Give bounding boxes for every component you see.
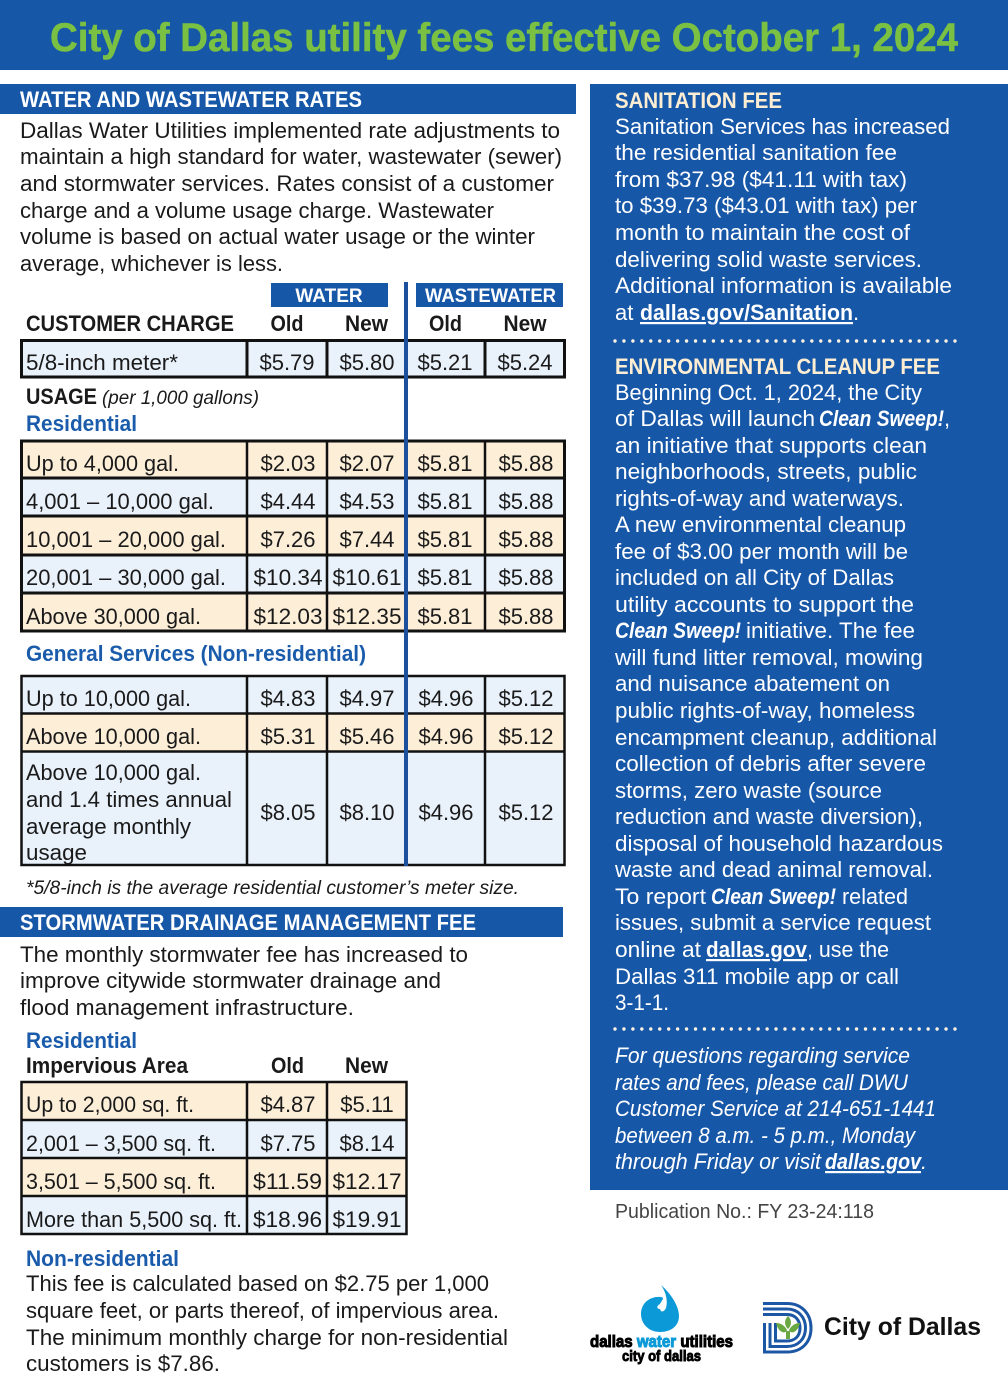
footnote: *5/8-inch is the average residential customer’s meter size. xyxy=(26,878,519,899)
table: water and wastewater rates xyxy=(21,282,565,866)
stormwater table header xyxy=(26,1028,389,1078)
sanitation fee section: SANITATION FEE xyxy=(615,88,782,113)
general services rows: Up to 10,000 gal. xyxy=(26,686,191,711)
general services rows: Above 10,000 gal. xyxy=(26,760,201,785)
text block: water rates intro: maintain a high standard for water, wastewater (sewer) xyxy=(20,144,562,169)
stormwater rows xyxy=(21,1082,407,1234)
residential rows: 20,001 – 30,000 gal. xyxy=(26,565,226,590)
residential rows: Above 30,000 gal. xyxy=(26,604,201,629)
contact information: For questions regarding service xyxy=(615,1043,910,1068)
stormwater rows: $12.17 xyxy=(332,1169,402,1194)
table column headers xyxy=(26,283,563,336)
contact information: rates and fees, please call DWU xyxy=(615,1070,908,1095)
environmental cleanup fee section: of Dallas will launch xyxy=(615,406,815,431)
environmental cleanup fee section: will fund litter removal, mowing xyxy=(614,645,923,670)
text block: non-residential stormwater: Non-residential xyxy=(26,1246,179,1271)
environmental cleanup fee section: rights-of-way and waterways. xyxy=(615,486,904,511)
text block: water rates intro xyxy=(20,118,562,276)
general services rows: usage xyxy=(26,840,87,865)
table column headers: New xyxy=(504,311,547,336)
residential rows: $5.81 xyxy=(417,604,473,629)
heading: general services: General Services (Non-residential) xyxy=(26,641,366,666)
environmental cleanup fee section: utility accounts to support the xyxy=(615,592,914,617)
residential rows: $2.07 xyxy=(339,451,395,476)
general services rows xyxy=(21,676,565,865)
text block: non-residential stormwater: square feet, or parts thereof, of impervious area. xyxy=(26,1298,499,1323)
stormwater table header: Old xyxy=(271,1053,304,1078)
environmental cleanup fee section: , use the xyxy=(807,937,889,962)
environmental cleanup fee section: A new environmental cleanup xyxy=(615,512,906,537)
text block: stormwater intro: improve citywide stormwater drainage and xyxy=(20,968,441,993)
heading: stormwater drainage management fee: STORMWATER DRAINAGE MANAGEMENT FEE xyxy=(20,910,476,935)
title banner xyxy=(0,0,1008,70)
water / wastewater divider xyxy=(404,282,408,866)
sanitation fee section: dallas.gov/Sanitation xyxy=(640,300,853,325)
text block: water rates intro: average, whichever is less. xyxy=(20,251,283,276)
table column headers: CUSTOMER CHARGE xyxy=(26,311,234,336)
environmental cleanup fee section: related xyxy=(842,884,908,909)
stormwater rows: More than 5,500 sq. ft. xyxy=(26,1207,242,1232)
residential rows: $12.03 xyxy=(254,604,322,629)
environmental cleanup fee section: collection of debris after severe xyxy=(615,751,926,776)
sanitation fee section: at xyxy=(615,300,633,325)
residential rows: $5.81 xyxy=(417,527,473,552)
row: customer charge xyxy=(21,340,565,377)
environmental cleanup fee section: reduction and waste diversion), xyxy=(615,804,923,829)
residential rows: $5.81 xyxy=(417,565,473,590)
residential rows: $5.81 xyxy=(417,451,473,476)
residential rows: $4.44 xyxy=(260,489,316,514)
contact information xyxy=(615,1043,936,1174)
table column headers: WATER xyxy=(295,286,363,307)
usage heading: USAGE xyxy=(26,384,97,409)
panel: sanitation, cleanup and contact xyxy=(590,84,1008,1190)
stormwater table header: Residential xyxy=(26,1028,137,1053)
sanitation fee section: month to maintain the cost of xyxy=(615,220,911,245)
text block: stormwater intro: The monthly stormwater fee has increased to xyxy=(20,942,468,967)
residential rows: $7.26 xyxy=(260,527,316,552)
stormwater rows: 2,001 – 3,500 sq. ft. xyxy=(26,1131,216,1156)
general services rows: $5.12 xyxy=(498,800,554,825)
environmental cleanup fee section: included on all City of Dallas xyxy=(615,565,894,590)
text block: non-residential stormwater: customers is $7.86. xyxy=(26,1351,220,1376)
general services rows: $5.46 xyxy=(339,724,395,749)
environmental cleanup fee section: issues, submit a service request xyxy=(615,910,931,935)
general services rows: $5.31 xyxy=(260,724,316,749)
general services rows: $8.05 xyxy=(260,800,316,825)
usage heading: (per 1,000 gallons) xyxy=(102,388,259,409)
sanitation fee section: delivering solid waste services. xyxy=(615,247,922,272)
text block: non-residential stormwater xyxy=(26,1246,508,1376)
residential rows: $5.88 xyxy=(498,489,554,514)
general services rows: Above 10,000 gal. xyxy=(26,724,201,749)
environmental cleanup fee section: To report xyxy=(615,884,706,909)
text block: water rates intro: volume is based on actual water usage or the winter xyxy=(20,224,535,249)
general services rows: $5.12 xyxy=(498,686,554,711)
logo: dallas water utilities: city of dallas xyxy=(622,1348,701,1365)
sanitation fee section xyxy=(615,88,952,325)
general services rows: $8.10 xyxy=(339,800,395,825)
sanitation fee section: . xyxy=(853,300,859,325)
residential rows: $2.03 xyxy=(260,451,316,476)
residential rows: 4,001 – 10,000 gal. xyxy=(26,489,214,514)
general services rows: $4.97 xyxy=(339,686,395,711)
general services rows: $4.83 xyxy=(260,686,316,711)
row: customer charge: $5.24 xyxy=(497,350,553,375)
residential rows xyxy=(21,441,565,631)
residential rows: $10.61 xyxy=(332,565,402,590)
text block: water rates intro: and stormwater services. Rates consist of a customer xyxy=(20,171,554,196)
table column headers: WASTEWATER xyxy=(425,286,556,307)
logo: dallas water utilities: dallas water utilities xyxy=(590,1332,733,1351)
environmental cleanup fee section: 3-1-1. xyxy=(615,990,669,1015)
environmental cleanup fee section: Beginning Oct. 1, 2024, the City xyxy=(615,380,922,405)
environmental cleanup fee section: and nuisance abatement on xyxy=(615,671,890,696)
residential rows: $5.88 xyxy=(498,604,554,629)
text block: water rates intro: charge and a volume usage charge. Wastewater xyxy=(20,198,494,223)
stormwater table header: Impervious Area xyxy=(26,1053,189,1078)
residential rows: Up to 4,000 gal. xyxy=(26,451,179,476)
usage heading: Residential xyxy=(26,411,137,436)
contact information: between 8 a.m. - 5 p.m., Monday xyxy=(615,1123,917,1148)
stormwater rows: $8.14 xyxy=(339,1131,395,1156)
sanitation fee section: Additional information is available xyxy=(615,273,952,298)
environmental cleanup fee section: Dallas 311 mobile app or call xyxy=(615,964,899,989)
general services rows: $4.96 xyxy=(418,724,474,749)
environmental cleanup fee section: ENVIRONMENTAL CLEANUP FEE xyxy=(615,354,940,379)
environmental cleanup fee section: an initiative that supports clean xyxy=(615,433,927,458)
sanitation fee section: Sanitation Services has increased xyxy=(615,114,950,139)
sanitation fee section: from $37.98 ($41.11 with tax) xyxy=(615,167,907,192)
row: customer charge: $5.80 xyxy=(339,350,395,375)
stormwater rows: $7.75 xyxy=(260,1131,316,1156)
table column headers: Old xyxy=(429,311,462,336)
environmental cleanup fee section: fee of $3.00 per month will be xyxy=(615,539,908,564)
sanitation fee section: to $39.73 ($43.01 with tax) per xyxy=(615,193,917,218)
title banner: City of Dallas utility fees effective October 1, 2024 xyxy=(50,16,959,60)
row: customer charge: 5/8-inch meter* xyxy=(26,350,178,375)
sanitation fee section: the residential sanitation fee xyxy=(615,140,897,165)
text block: water rates intro: Dallas Water Utilities implemented rate adjustments to xyxy=(20,118,560,143)
residential rows: $5.81 xyxy=(417,489,473,514)
icon: green leaves xyxy=(776,1316,800,1339)
publication number: Publication No.: FY 23-24:118 xyxy=(615,1201,874,1223)
stormwater rows: $4.87 xyxy=(260,1092,316,1117)
stormwater rows: 3,501 – 5,500 sq. ft. xyxy=(26,1169,216,1194)
stormwater rows: $5.11 xyxy=(340,1092,394,1117)
heading: water and wastewater rates xyxy=(0,84,576,114)
general services rows: $4.96 xyxy=(418,800,474,825)
environmental cleanup fee section xyxy=(614,354,950,1015)
stormwater rows: Up to 2,000 sq. ft. xyxy=(26,1092,194,1117)
residential rows: $5.88 xyxy=(498,451,554,476)
stormwater rows: $11.59 xyxy=(253,1169,322,1194)
environmental cleanup fee section: initiative. The fee xyxy=(746,618,915,643)
logo: city of dallas xyxy=(763,1304,981,1352)
environmental cleanup fee section: storms, zero waste (source xyxy=(615,778,882,803)
environmental cleanup fee section: waste and dead animal removal. xyxy=(614,857,933,882)
environmental cleanup fee section: disposal of household hazardous xyxy=(615,831,943,856)
contact information: dallas.gov xyxy=(825,1149,923,1174)
general services rows: average monthly xyxy=(26,814,191,839)
logo: city of dallas: City of Dallas xyxy=(824,1313,981,1341)
residential rows: $10.34 xyxy=(254,565,322,590)
environmental cleanup fee section: Clean Sweep! xyxy=(819,406,944,431)
icon: D mark xyxy=(763,1304,811,1352)
text block: non-residential stormwater: This fee is calculated based on $2.75 per 1,000 xyxy=(26,1271,489,1296)
table column headers: Old xyxy=(270,311,304,336)
environmental cleanup fee section: Clean Sweep! xyxy=(615,618,741,643)
environmental cleanup fee section: , xyxy=(944,406,950,431)
table column headers: New xyxy=(345,311,389,336)
table: stormwater residential xyxy=(21,1028,407,1234)
residential rows: $12.35 xyxy=(332,604,402,629)
contact information: . xyxy=(921,1149,927,1174)
row: customer charge: $5.79 xyxy=(259,350,315,375)
usage heading xyxy=(26,384,259,436)
environmental cleanup fee section: online at xyxy=(615,937,701,962)
general services rows: and 1.4 times annual xyxy=(26,787,232,812)
general services rows: $4.96 xyxy=(418,686,474,711)
environmental cleanup fee section: neighborhoods, streets, public xyxy=(615,459,917,484)
contact information: Customer Service at 214-651-1441 xyxy=(615,1096,936,1121)
contact information: through Friday or visit xyxy=(615,1149,822,1174)
residential rows: $5.88 xyxy=(498,565,554,590)
row: customer charge: $5.21 xyxy=(417,350,473,375)
text block: stormwater intro: flood management infrastructure. xyxy=(20,995,354,1020)
residential rows: 10,001 – 20,000 gal. xyxy=(26,527,226,552)
residential rows: $7.44 xyxy=(339,527,395,552)
stormwater rows: $18.96 xyxy=(253,1207,322,1232)
residential rows: $4.53 xyxy=(339,489,395,514)
general services rows: $5.12 xyxy=(498,724,554,749)
text block: non-residential stormwater: The minimum monthly charge for non-residential xyxy=(26,1325,508,1350)
environmental cleanup fee section: Clean Sweep! xyxy=(711,884,836,909)
heading: water and wastewater rates: WATER AND WASTEWATER RATES xyxy=(20,87,362,112)
residential rows: $5.88 xyxy=(498,527,554,552)
environmental cleanup fee section: public rights-of-way, homeless xyxy=(615,698,915,723)
stormwater rows: $19.91 xyxy=(332,1207,402,1232)
text block: stormwater intro xyxy=(20,942,468,1020)
logo: dallas water utilities xyxy=(590,1285,733,1365)
environmental cleanup fee section: dallas.gov xyxy=(706,937,808,962)
environmental cleanup fee section: encampment cleanup, additional xyxy=(615,725,937,750)
stormwater table header: New xyxy=(345,1053,389,1078)
